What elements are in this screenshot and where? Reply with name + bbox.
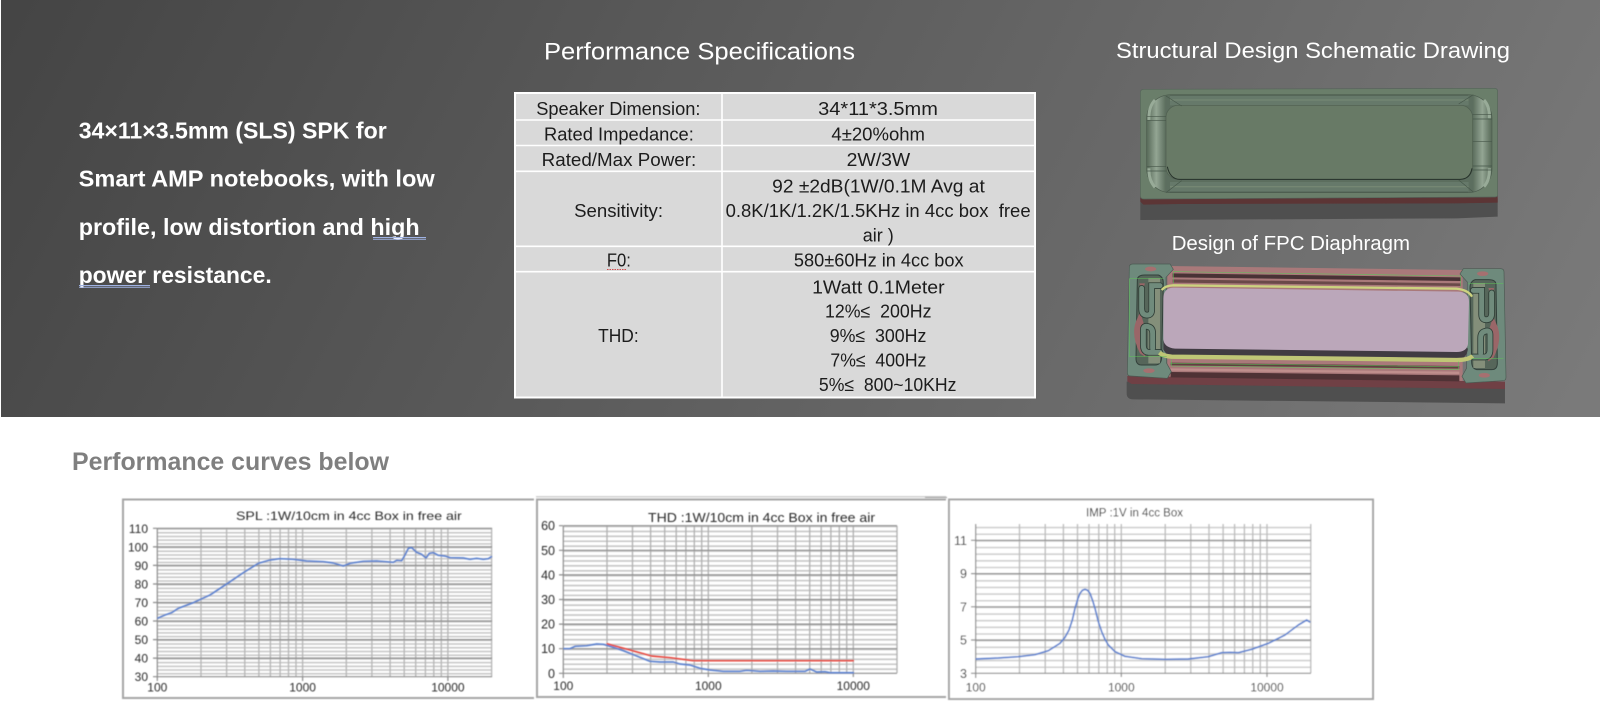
SPL x axis labels: 100 [147, 681, 168, 695]
THD x axis labels: 1000 [695, 679, 722, 693]
row: THD [598, 276, 956, 395]
SPL y axis labels: 40 [135, 652, 148, 666]
row: sensitivity: 92 ±2dB(1W/0.1M Avg at [772, 175, 985, 196]
row: THD: 12%≤ 200Hz [825, 300, 932, 321]
SPL curve [157, 548, 492, 618]
IMP title: IMP :1V in 4cc Box [1086, 508, 1183, 520]
schematic: speaker top view [1140, 88, 1498, 220]
row: THD: 7%≤ 400Hz [830, 350, 926, 371]
IMP y axis labels [954, 534, 967, 681]
row: rated/max power: 2W/3W [847, 149, 911, 170]
THD y axis labels: 0 [548, 667, 555, 681]
SPL y axis labels: 30 [135, 670, 148, 684]
chart: IMP [925, 498, 1373, 699]
THD x axis labels [553, 679, 870, 693]
IMP y axis labels: 9 [960, 567, 967, 581]
IMP y axis labels: 11 [954, 534, 967, 548]
row: sensitivity: 0.8K/1K/1.2K/1.5KHz in 4cc box free [726, 200, 1031, 221]
row: THD: THD: [598, 325, 639, 346]
THD y axis labels: 60 [541, 519, 555, 533]
IMP y axis labels: 5 [960, 634, 967, 648]
heading: performance specifications: Performance Specifications [544, 38, 855, 65]
THD y axis labels: 50 [541, 544, 555, 558]
row: rated impedance [544, 124, 925, 145]
specifications table [515, 93, 1035, 398]
header panel [1, 0, 1600, 417]
row: sensitivity: Sensitivity: [574, 200, 663, 221]
SPL y axis labels: 70 [135, 596, 148, 610]
row: speaker dimension: 34*11*3.5mm [818, 98, 938, 119]
THD limit line [607, 644, 854, 661]
THD x axis labels: 100 [553, 679, 574, 693]
row: rated impedance: 4±20%ohm [831, 124, 925, 145]
row: THD: 5%≤ 800~10KHz [819, 374, 956, 395]
row: THD: 9%≤ 300Hz [830, 325, 926, 346]
row: speaker dimension [536, 98, 938, 119]
IMP y axis labels: 3 [960, 667, 967, 681]
IMP x axis labels: 1000 [1108, 681, 1135, 695]
row: F0 [607, 250, 964, 271]
chart: THD [536, 497, 946, 697]
SPL y axis labels [128, 522, 148, 684]
SPL x axis labels: 10000 [431, 681, 465, 695]
SPL y axis labels: 90 [135, 559, 148, 573]
intro text: Smart AMP notebooks, with low [79, 166, 435, 192]
IMP curve [976, 589, 1310, 659]
row: sensitivity: air ) [863, 225, 894, 246]
row: F0: F0: [607, 250, 631, 271]
THD y axis labels: 40 [541, 568, 555, 582]
THD y axis labels [541, 519, 555, 681]
chart: SPL [123, 500, 534, 698]
heading: structural design: Structural Design Schematic Drawing [1116, 38, 1510, 63]
THD curve [563, 644, 854, 673]
intro text: power resistance. [79, 262, 272, 288]
intro text: 34×11×3.5mm (SLS) SPK for [79, 117, 387, 143]
row: rated/max power [542, 149, 911, 170]
IMP x axis labels: 100 [966, 681, 986, 695]
IMP x axis labels: 10000 [1250, 681, 1284, 695]
IMP y axis labels: 7 [960, 600, 967, 614]
heading: performance curves: Performance curves below [72, 448, 390, 476]
SPL x axis labels [147, 681, 465, 695]
SPL x axis labels: 1000 [289, 681, 316, 695]
SPL y axis labels: 60 [135, 614, 148, 628]
intro text: profile, low distortion and high [79, 214, 420, 240]
schematic: FPC diaphragm [1127, 264, 1506, 403]
THD y axis labels: 10 [541, 642, 555, 656]
row: sensitivity [574, 175, 1031, 246]
row: THD: 1Watt 0.1Meter [812, 276, 945, 297]
SPL y axis labels: 100 [128, 540, 148, 554]
SPL y axis labels: 50 [135, 633, 148, 647]
IMP x axis labels [966, 681, 1284, 695]
right end cap [1460, 269, 1506, 383]
row: F0: 580±60Hz in 4cc box [794, 250, 964, 271]
intro text [79, 117, 435, 288]
SPL y axis labels: 110 [129, 522, 148, 536]
row: rated/max power: Rated/Max Power: [542, 149, 696, 170]
THD x axis labels: 10000 [837, 679, 870, 693]
THD title: THD :1W/10cm in 4cc Box in free air [648, 510, 876, 525]
SPL y axis labels: 80 [135, 578, 148, 592]
SPL title: SPL :1W/10cm in 4cc Box in free air [236, 509, 462, 523]
left end cap [1127, 264, 1173, 378]
caption: FPC diaphragm: Design of FPC Diaphragm [1172, 232, 1410, 255]
row: rated impedance: Rated Impedance: [544, 124, 694, 145]
row: speaker dimension: Speaker Dimension: [536, 98, 700, 119]
THD y axis labels: 20 [541, 618, 555, 632]
THD y axis labels: 30 [541, 593, 555, 607]
